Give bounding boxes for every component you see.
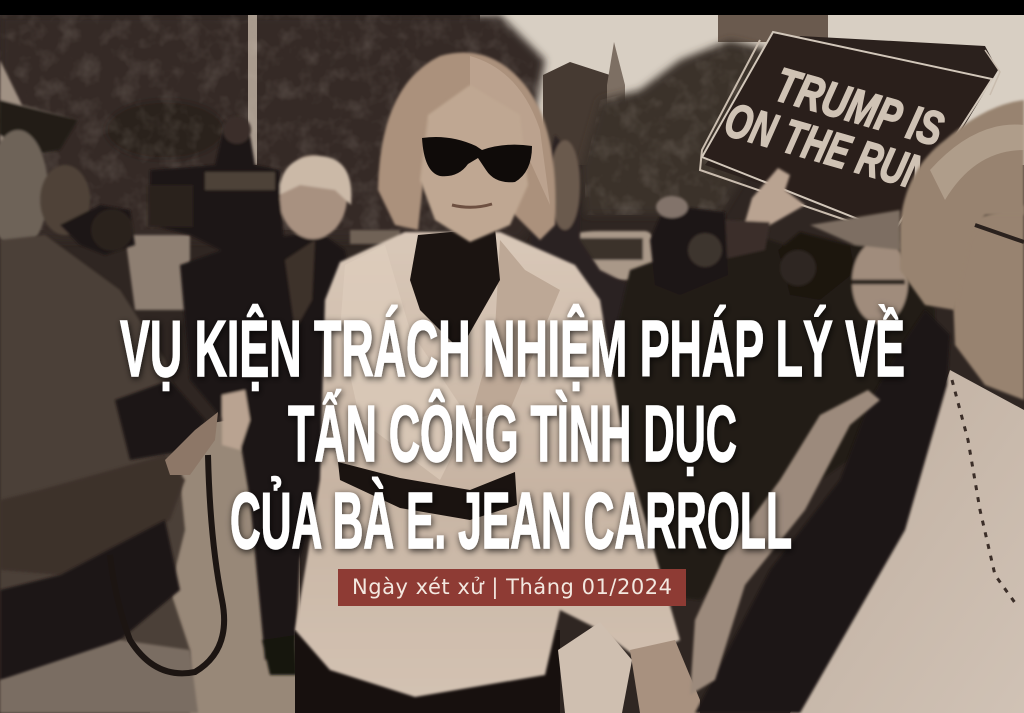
- hat person: [0, 60, 135, 255]
- press crowd, left: [0, 60, 355, 713]
- street lamp pole: [248, 15, 257, 165]
- photo camera right: [778, 232, 855, 300]
- protest sign: TRUMP IS: [769, 59, 949, 157]
- pavement: [150, 420, 300, 713]
- scarf: [690, 390, 880, 695]
- buildings: [543, 15, 828, 165]
- protest sign: ON THE RUN: [719, 94, 936, 203]
- TV camera: [150, 120, 285, 265]
- vans in the street: [125, 230, 655, 310]
- foliage texture: [0, 15, 780, 235]
- cuff and hand: [558, 622, 632, 713]
- hair: [378, 53, 556, 240]
- face and neck: [950, 205, 1024, 400]
- sunglasses: [422, 137, 532, 182]
- date tag: [338, 569, 686, 606]
- E. Jean Carroll figure: [295, 53, 700, 713]
- man behind with hair: [530, 135, 640, 350]
- protest sign: [700, 32, 1000, 233]
- woman in foreground right: [690, 100, 1024, 713]
- left jacket person: [0, 235, 190, 713]
- trees behind right: [580, 40, 770, 215]
- hand: [222, 390, 250, 450]
- beaded necklace: [952, 380, 1018, 607]
- mouth: [452, 204, 492, 207]
- date tag: Ngày xét xử | Tháng 01/2024: [352, 575, 672, 600]
- eyeglasses arm: [975, 225, 1024, 242]
- trousers: [295, 630, 560, 713]
- turtleneck: [410, 228, 500, 350]
- jacket: [295, 232, 680, 697]
- belt: [338, 462, 517, 520]
- title: [120, 304, 905, 565]
- face: [420, 85, 528, 242]
- press crowd, right: [600, 168, 935, 600]
- woman with glasses: [852, 240, 908, 324]
- cameraman: [148, 116, 355, 675]
- white shirt: [790, 370, 1024, 713]
- sky: [480, 15, 1024, 165]
- hair: [900, 100, 1024, 310]
- video camera right: [650, 205, 728, 295]
- black vest: [695, 310, 950, 713]
- trees behind left: [0, 15, 560, 240]
- top black band: [0, 0, 1024, 15]
- raised hand: [745, 168, 805, 225]
